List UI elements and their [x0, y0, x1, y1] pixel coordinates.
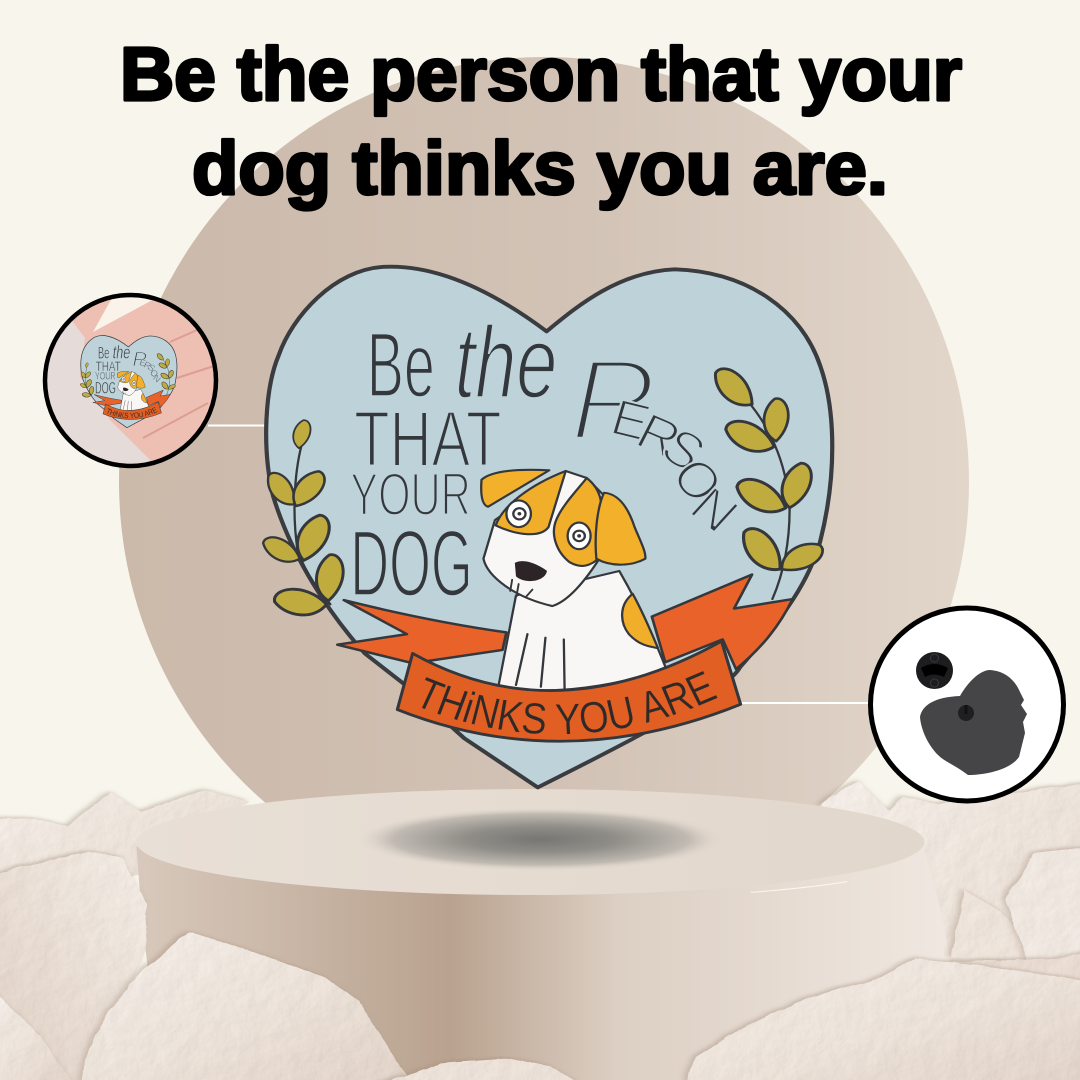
whiskers [510, 580, 532, 597]
podium wall [136, 847, 964, 1080]
hand lettering [350, 306, 749, 616]
right eye [568, 523, 591, 549]
podium and rocks [0, 780, 1080, 1080]
right callout: pin back [870, 608, 1064, 801]
banner text path [413, 694, 726, 734]
dog body spot [622, 594, 658, 648]
dog body [498, 571, 666, 691]
left eye [506, 500, 531, 527]
dog legs [516, 634, 565, 689]
dog head [483, 471, 604, 606]
sleeve [47, 322, 151, 464]
white disc [870, 608, 1064, 801]
large beige circle [119, 57, 969, 907]
rim highlight [751, 882, 847, 892]
right olive branch [708, 363, 828, 599]
podium top [136, 789, 924, 895]
enamel pin [262, 264, 834, 790]
banner text: THiNKS YOU ARE [422, 671, 718, 734]
dog [481, 470, 666, 691]
gap between thumb and fingers [93, 298, 152, 332]
mouth [515, 561, 547, 581]
heart body [266, 267, 832, 787]
ribbon tails [337, 574, 793, 669]
left olive branch [259, 419, 346, 619]
title: dog thinks you are. [192, 126, 888, 210]
hand lettering: DOG [350, 510, 473, 616]
photo ring [45, 295, 216, 466]
hand lettering: P [570, 334, 654, 464]
left ear [481, 470, 549, 507]
hand photo [47, 297, 214, 464]
right ear [596, 493, 645, 565]
connector line: left callout [208, 424, 266, 426]
hand lettering: the [455, 306, 557, 419]
pin shadow on podium [356, 807, 725, 871]
finger creases [143, 330, 214, 438]
hand lettering: ERSON [605, 389, 749, 544]
right eye patch [554, 478, 602, 566]
hand lettering: THAT [354, 394, 501, 483]
left callout: pin on a hand [40, 290, 220, 475]
hand lettering: YOUR [350, 462, 471, 529]
butterfly clutch [916, 652, 953, 689]
left eye patch [496, 471, 566, 534]
hand lettering: Be [367, 314, 435, 417]
heart back plate [920, 670, 1027, 775]
small pin [79, 335, 177, 428]
banner [397, 641, 741, 741]
title: Be the person that your [120, 32, 962, 116]
pin post [958, 705, 974, 721]
connector line: right callout [738, 702, 872, 704]
title [120, 32, 962, 210]
rocks behind podium [0, 780, 1080, 1080]
rocks in front of podium [0, 848, 1080, 1080]
